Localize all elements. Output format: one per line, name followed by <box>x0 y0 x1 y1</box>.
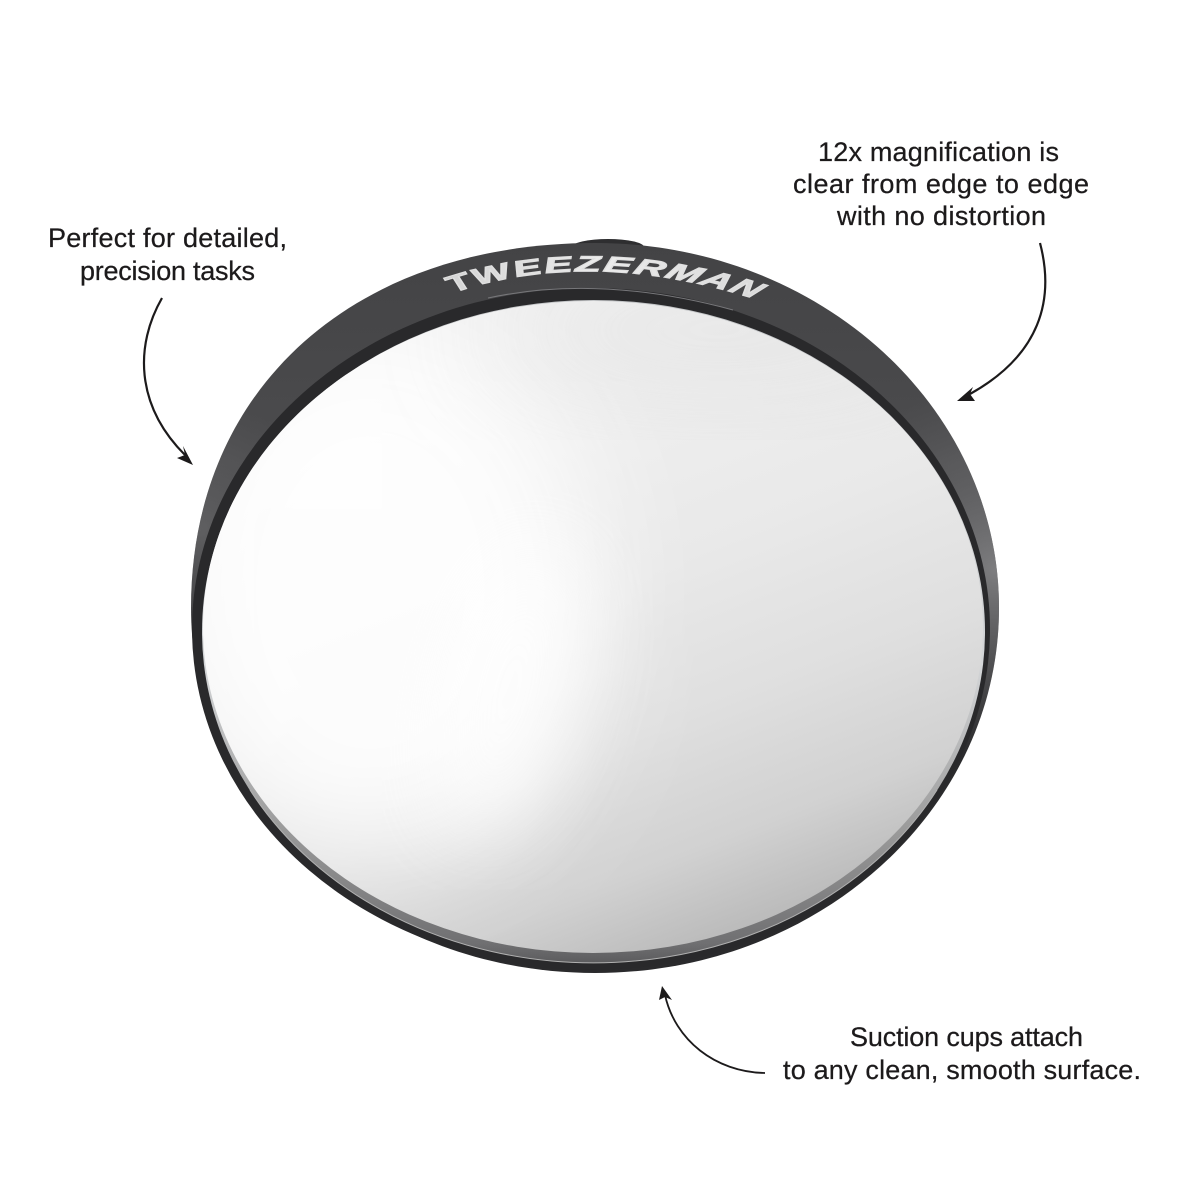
callout text: Perfect for detailed, <box>48 223 287 253</box>
bevel highlight line <box>250 790 937 963</box>
callout text: to any clean, smooth surface. <box>783 1055 1141 1085</box>
rim side highlights <box>191 438 999 726</box>
callout: magnification <box>793 137 1089 401</box>
callout text <box>783 1022 1141 1085</box>
callout text: precision tasks <box>80 256 255 286</box>
arrow to bottom rim <box>659 986 765 1073</box>
ring highlight line <box>488 288 733 310</box>
mirror glass <box>203 301 983 953</box>
inner dark ring <box>192 288 990 970</box>
outer rim <box>191 243 999 973</box>
callout text <box>48 223 287 286</box>
callout text: with no distortion <box>836 201 1046 231</box>
arrow to left rim <box>144 298 193 465</box>
callout: suction cups <box>659 986 1141 1085</box>
callout text: 12x magnification is <box>818 137 1059 167</box>
callout text: Suction cups attach <box>850 1022 1083 1052</box>
mirror bevel <box>202 300 985 963</box>
callout text: clear from edge to edge <box>793 169 1089 199</box>
arrow to right rim <box>957 243 1045 401</box>
mirror product <box>191 239 999 973</box>
callout: precision tasks <box>48 223 287 465</box>
brand logo on rim: TWEEZERMAN <box>442 256 770 298</box>
suction cup nub <box>572 239 644 255</box>
callout text <box>793 137 1089 231</box>
